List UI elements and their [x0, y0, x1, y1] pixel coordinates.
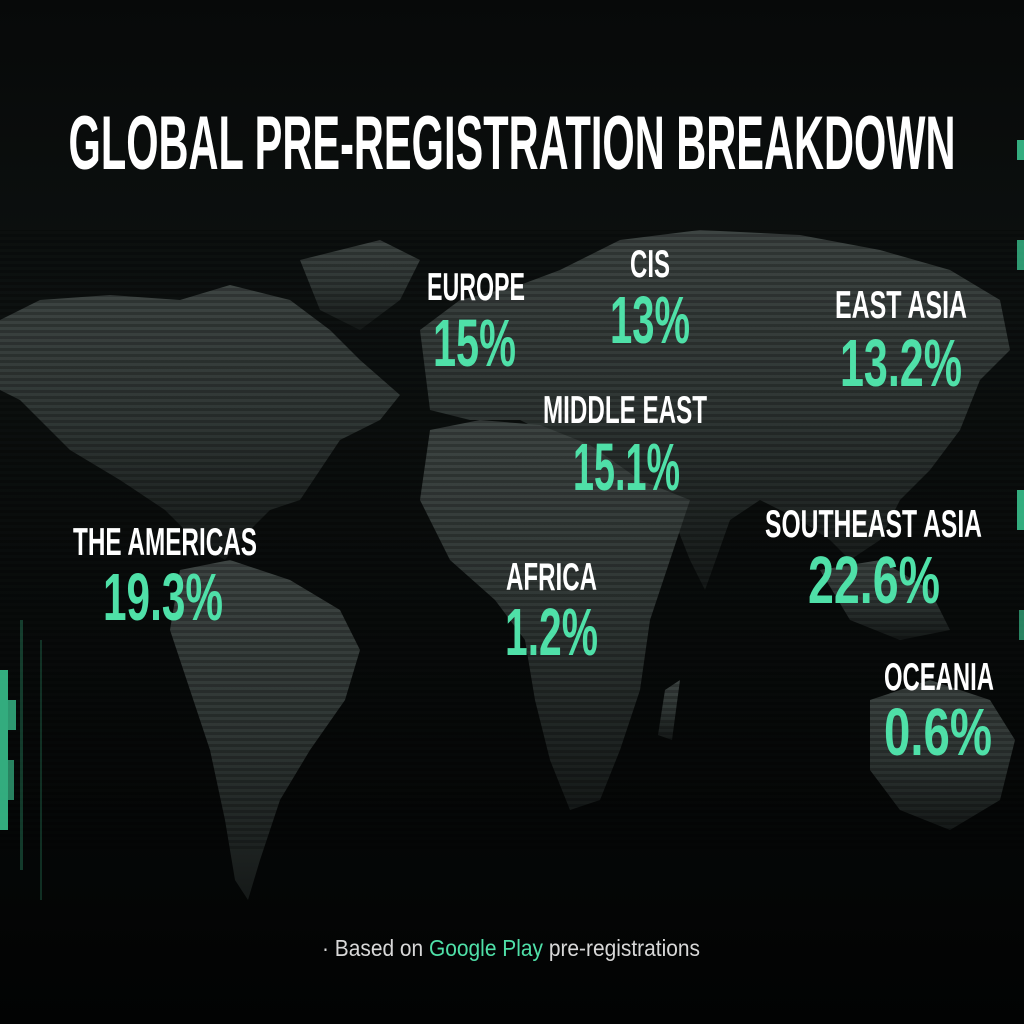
label: europe: 15% [433, 306, 516, 381]
label: middle east: 15.1% [573, 430, 680, 505]
label: oceania [884, 656, 994, 770]
label: east asia [835, 284, 967, 401]
North America [0, 285, 400, 560]
label: cis: CIS [630, 243, 670, 286]
Africa [420, 420, 690, 810]
label: europe: EUROPE [427, 266, 525, 309]
Europe + Asia [420, 230, 1010, 590]
SE Asia islands [820, 560, 950, 640]
label: middle east: MIDDLE EAST [543, 389, 707, 432]
label: southeast asia: 22.6% [808, 543, 940, 618]
Greenland [300, 240, 420, 330]
label: africa: 1.2% [505, 595, 598, 670]
South America [170, 560, 360, 900]
label: cis: 13% [610, 283, 690, 358]
glitch left [0, 140, 1024, 900]
label: africa [505, 556, 598, 670]
label: cis [610, 243, 690, 358]
label: middle east [543, 389, 707, 505]
label: americas: THE AMERICAS [73, 521, 257, 564]
Madagascar [658, 680, 680, 740]
label: southeast asia [765, 503, 982, 618]
footer note: · Based on Google Play pre-registrations [322, 935, 700, 961]
label: europe [427, 266, 525, 381]
Australia [870, 680, 1015, 830]
label: americas [73, 521, 257, 635]
world map [0, 230, 1015, 900]
label: africa: AFRICA [506, 556, 597, 599]
label: americas: 19.3% [103, 560, 223, 635]
